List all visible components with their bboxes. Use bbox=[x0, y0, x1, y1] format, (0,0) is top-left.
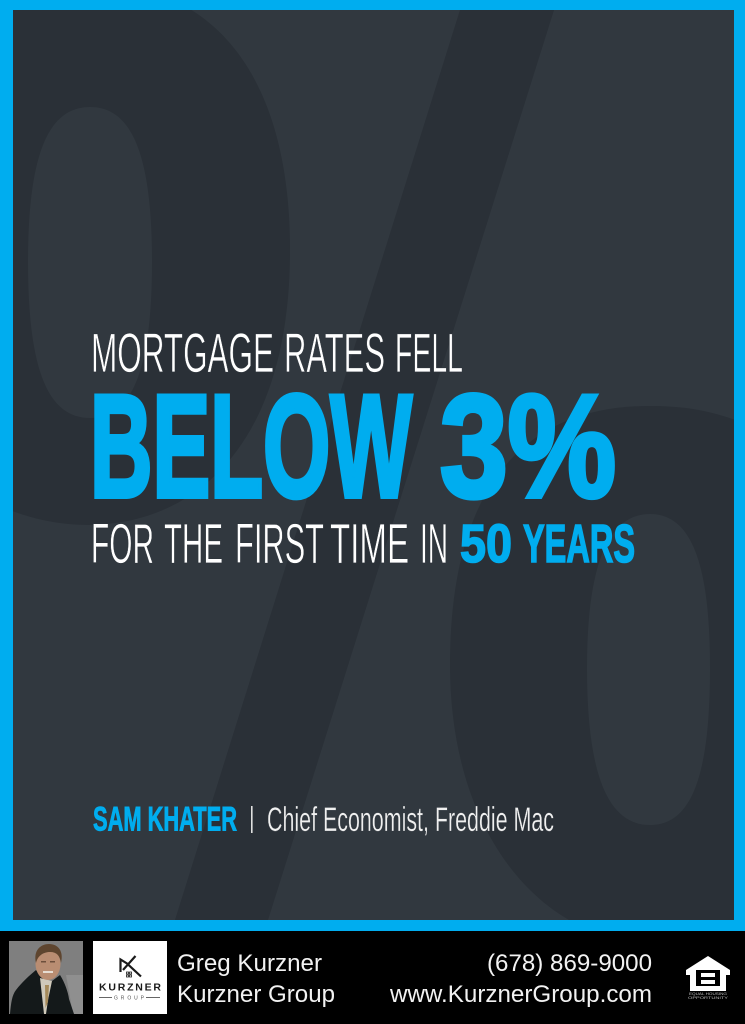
icon: equal housing opportunity: OPPORTUNITY bbox=[688, 995, 728, 1000]
footer bar bbox=[0, 931, 745, 1024]
subheading: for the first time in 50 years: IN bbox=[420, 512, 448, 576]
contact name and company: Kurzner Group bbox=[177, 981, 335, 1008]
contact phone and website bbox=[389, 950, 652, 1008]
icon: equal housing opportunity: EQUAL HOUSING bbox=[689, 991, 727, 996]
attribution: sam khater, chief economist, freddie mac: SAM KHATER bbox=[93, 800, 237, 838]
subheading: for the first time in 50 years: THE bbox=[164, 512, 223, 576]
heading line: mortgage rates fell: MORTGAGE bbox=[91, 321, 274, 384]
icon: house k mark bbox=[120, 956, 141, 977]
logo: kurzner group bbox=[93, 941, 167, 1014]
subheading: for the first time in 50 years: 50 bbox=[460, 514, 512, 574]
attribution: sam khater, chief economist, freddie mac bbox=[93, 800, 554, 839]
subheading: for the first time in 50 years: FIRST bbox=[235, 512, 324, 576]
subheading: for the first time in 50 years: YEARS bbox=[523, 514, 635, 574]
attribution: sam khater, chief economist, freddie mac: Chief Economist, Freddie Mac bbox=[267, 801, 554, 839]
contact phone and website: www.KurznerGroup.com bbox=[389, 981, 652, 1008]
contact name and company: Greg Kurzner bbox=[177, 950, 322, 977]
heading line: mortgage rates fell: RATES bbox=[284, 321, 385, 384]
headline: below 3%: BELOW bbox=[90, 364, 412, 528]
logo wordmark: KURZNER bbox=[99, 982, 161, 994]
heading line: mortgage rates fell: FELL bbox=[395, 321, 463, 384]
icon: equal housing opportunity bbox=[686, 956, 730, 1000]
photo: agent portrait bbox=[9, 941, 83, 1014]
contact name and company bbox=[177, 950, 335, 1008]
subheading: for the first time in 50 years bbox=[91, 512, 635, 576]
subheading: for the first time in 50 years: TIME bbox=[330, 512, 409, 576]
headline: below 3%: 3% bbox=[440, 364, 616, 528]
contact phone and website: (678) 869-9000 bbox=[487, 950, 652, 977]
subheading: for the first time in 50 years: FOR bbox=[91, 512, 154, 576]
logo subtitle: GROUP bbox=[114, 996, 145, 1002]
